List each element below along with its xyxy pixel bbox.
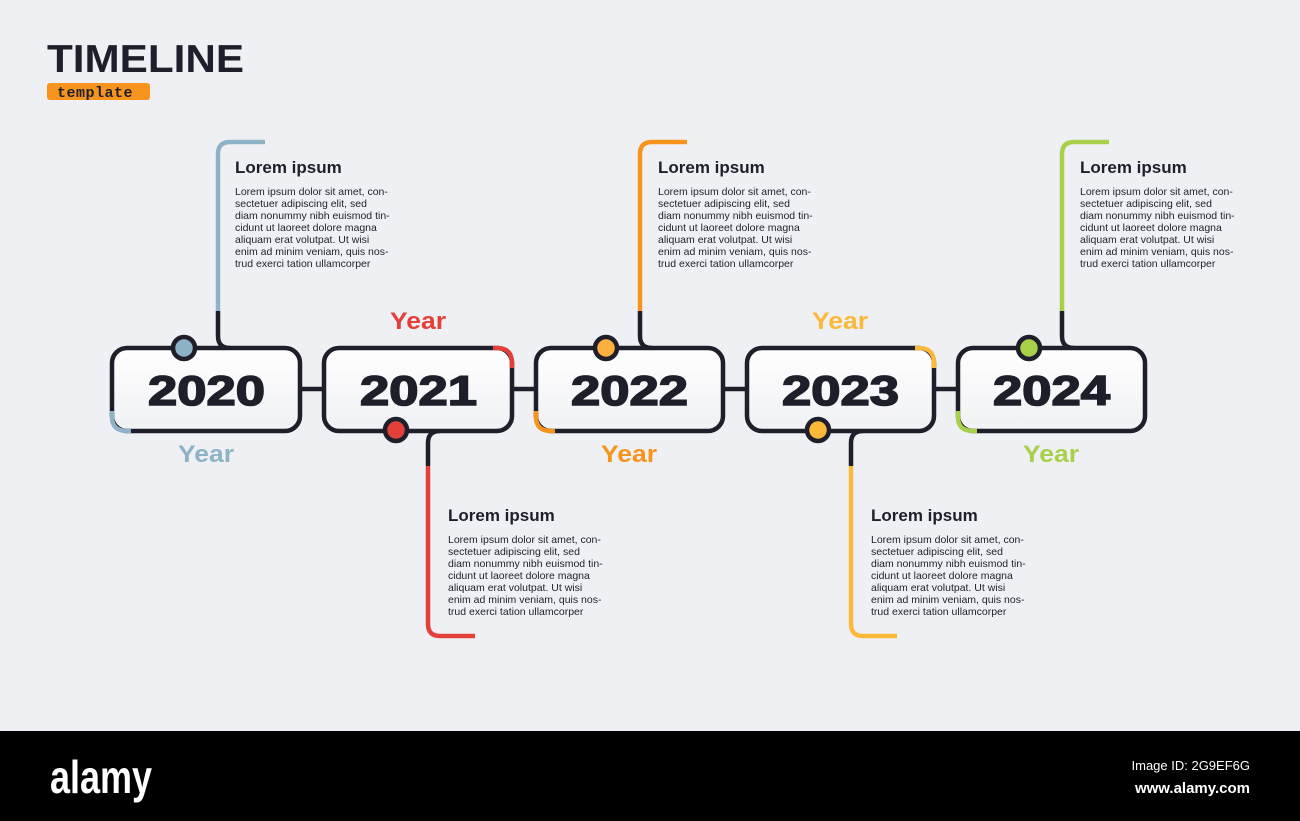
milestone 2024 bbox=[958, 142, 1145, 468]
text block 2024: enim ad minim veniam, quis nos- bbox=[1080, 246, 1234, 258]
text block 2020: sectetuer adipiscing elit, sed bbox=[235, 198, 367, 210]
footer bar: Image ID: 2G9EF6G bbox=[1132, 758, 1250, 773]
milestone 2020 bbox=[112, 142, 300, 468]
text block 2021: Lorem ipsum dolor sit amet, con- bbox=[448, 534, 601, 546]
milestone 2023: 2023 bbox=[782, 367, 899, 414]
text block 2022 bbox=[658, 158, 813, 270]
text block 2021: aliquam erat volutpat. Ut wisi bbox=[448, 582, 582, 594]
text block 2024: trud exerci tation ullamcorper bbox=[1080, 258, 1216, 270]
milestone 2023: Year bbox=[812, 308, 868, 335]
text block 2022: diam nonummy nibh euismod tin- bbox=[658, 210, 813, 222]
milestone 2020: Year bbox=[178, 441, 234, 468]
text block 2022: Lorem ipsum bbox=[658, 158, 765, 177]
text block 2023: trud exerci tation ullamcorper bbox=[871, 606, 1007, 618]
footer bar: www.alamy.com bbox=[1134, 780, 1250, 797]
text block 2021: enim ad minim veniam, quis nos- bbox=[448, 594, 602, 606]
text block 2020: diam nonummy nibh euismod tin- bbox=[235, 210, 390, 222]
milestone 2021 bbox=[324, 308, 512, 636]
title: template bbox=[57, 85, 133, 102]
text block 2022: aliquam erat volutpat. Ut wisi bbox=[658, 234, 792, 246]
text block 2020: aliquam erat volutpat. Ut wisi bbox=[235, 234, 369, 246]
text block 2020: trud exerci tation ullamcorper bbox=[235, 258, 371, 270]
text block 2024: Lorem ipsum bbox=[1080, 158, 1187, 177]
milestone 2024: Year bbox=[1023, 441, 1079, 468]
text block 2021: Lorem ipsum bbox=[448, 506, 555, 525]
text block 2020: cidunt ut laoreet dolore magna bbox=[235, 222, 377, 234]
text block 2020: enim ad minim veniam, quis nos- bbox=[235, 246, 389, 258]
milestone 2020: 2020 bbox=[148, 367, 265, 414]
title: TIMELINE bbox=[47, 38, 244, 81]
text block 2024: diam nonummy nibh euismod tin- bbox=[1080, 210, 1235, 222]
text block 2024 bbox=[1080, 158, 1235, 270]
text block 2023: cidunt ut laoreet dolore magna bbox=[871, 570, 1013, 582]
text block 2024: cidunt ut laoreet dolore magna bbox=[1080, 222, 1222, 234]
text block 2022: sectetuer adipiscing elit, sed bbox=[658, 198, 790, 210]
text block 2023: Lorem ipsum bbox=[871, 506, 978, 525]
text block 2020 bbox=[235, 158, 390, 270]
text block 2023: sectetuer adipiscing elit, sed bbox=[871, 546, 1003, 558]
text block 2023: Lorem ipsum dolor sit amet, con- bbox=[871, 534, 1024, 546]
text block 2023: diam nonummy nibh euismod tin- bbox=[871, 558, 1026, 570]
milestone 2021: Year bbox=[390, 308, 446, 335]
text block 2022: Lorem ipsum dolor sit amet, con- bbox=[658, 186, 811, 198]
text block 2021 bbox=[448, 506, 603, 618]
text block 2020: Lorem ipsum dolor sit amet, con- bbox=[235, 186, 388, 198]
milestone 2022 bbox=[536, 142, 723, 468]
text block 2024: sectetuer adipiscing elit, sed bbox=[1080, 198, 1212, 210]
text block 2022: cidunt ut laoreet dolore magna bbox=[658, 222, 800, 234]
text block 2023: enim ad minim veniam, quis nos- bbox=[871, 594, 1025, 606]
footer bar: alamy bbox=[50, 751, 152, 803]
connectors between boxes bbox=[300, 387, 958, 391]
text block 2022: enim ad minim veniam, quis nos- bbox=[658, 246, 812, 258]
text block 2021: trud exerci tation ullamcorper bbox=[448, 606, 584, 618]
text block 2021: diam nonummy nibh euismod tin- bbox=[448, 558, 603, 570]
milestone 2023 bbox=[747, 308, 934, 636]
text block 2024: Lorem ipsum dolor sit amet, con- bbox=[1080, 186, 1233, 198]
milestone 2021: 2021 bbox=[360, 367, 477, 414]
text block 2023: aliquam erat volutpat. Ut wisi bbox=[871, 582, 1005, 594]
milestone 2022: Year bbox=[601, 441, 657, 468]
milestone 2024: 2024 bbox=[993, 367, 1111, 414]
text block 2022: trud exerci tation ullamcorper bbox=[658, 258, 794, 270]
text block 2020: Lorem ipsum bbox=[235, 158, 342, 177]
milestone 2022: 2022 bbox=[571, 367, 688, 414]
footer bar bbox=[0, 731, 1300, 821]
text block 2024: aliquam erat volutpat. Ut wisi bbox=[1080, 234, 1214, 246]
title bbox=[47, 38, 244, 102]
text block 2021: cidunt ut laoreet dolore magna bbox=[448, 570, 590, 582]
text block 2021: sectetuer adipiscing elit, sed bbox=[448, 546, 580, 558]
text block 2023 bbox=[871, 506, 1026, 618]
